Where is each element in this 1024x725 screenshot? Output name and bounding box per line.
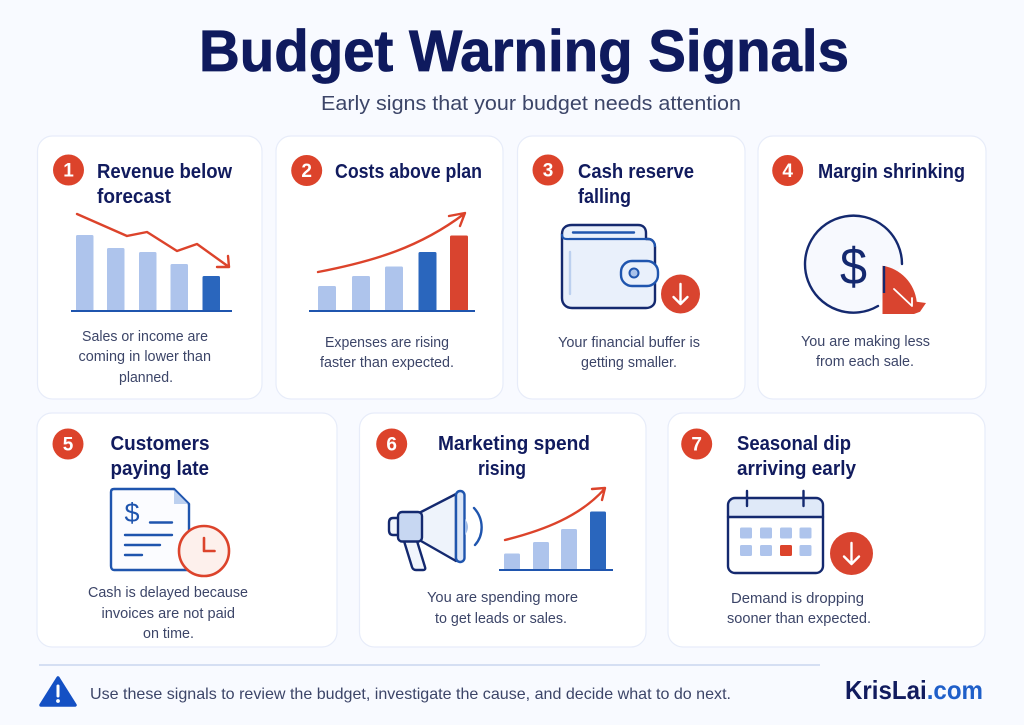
panel: costs above plan — [276, 136, 503, 399]
bar chart: rising costs — [309, 213, 475, 311]
panel: revenue below forecast — [38, 136, 262, 399]
badge 6 — [376, 428, 407, 460]
badge 2 — [291, 155, 322, 186]
heading: Cash reserve — [578, 161, 694, 183]
icon: down arrow badge — [830, 532, 873, 575]
description — [78, 329, 211, 386]
bar chart: rising spend — [499, 488, 613, 570]
footer note: Use these signals to review the budget, investigate the cause, and decide what to do next. — [90, 686, 731, 703]
badge 7: 7 — [691, 434, 702, 456]
badge 4: 4 — [782, 161, 793, 182]
badge 1: 1 — [63, 160, 74, 182]
badge 6: 6 — [386, 434, 397, 456]
icon: coin with shrinking margin: $ — [840, 238, 867, 296]
description: invoices are not paid — [102, 606, 235, 622]
description: from each sale. — [816, 354, 914, 370]
heading — [97, 161, 232, 208]
badge 2: 2 — [301, 161, 312, 182]
description: faster than expected. — [320, 355, 454, 371]
description: getting smaller. — [581, 355, 677, 371]
heading: arriving early — [737, 458, 857, 480]
badge 4 — [772, 155, 803, 186]
description: You are making less — [801, 334, 930, 350]
subtitle: Early signs that your budget needs attention — [321, 92, 741, 115]
badge 5: 5 — [63, 434, 74, 456]
icon: wallet — [562, 225, 658, 308]
icon: calendar — [728, 491, 823, 573]
title: Budget Warning Signals — [199, 19, 849, 84]
icon: coin with shrinking margin — [805, 216, 926, 314]
description: Expenses are rising — [325, 335, 449, 351]
icon: invoice: $ — [124, 498, 140, 528]
heading: Revenue below — [97, 161, 232, 183]
heading: paying late — [110, 458, 209, 480]
description: Sales or income are — [82, 329, 208, 345]
heading — [110, 433, 210, 480]
heading — [737, 433, 857, 480]
heading — [438, 433, 590, 480]
description: to get leads or sales. — [435, 611, 567, 627]
bar chart: falling revenue — [71, 214, 232, 311]
panel: cash reserve falling — [518, 136, 745, 399]
heading: falling — [578, 186, 631, 208]
description: You are spending more — [427, 590, 578, 606]
panel: customers paying late — [37, 413, 337, 647]
icon: warning triangle — [41, 678, 75, 705]
panel: margin shrinking — [758, 136, 986, 399]
description — [427, 590, 578, 627]
heading: rising — [478, 458, 526, 480]
description: planned. — [119, 370, 173, 386]
badge 3: 3 — [543, 160, 553, 182]
icon: invoice — [111, 489, 189, 570]
badge 3 — [532, 154, 564, 186]
heading: Costs above plan — [335, 161, 482, 183]
description — [88, 585, 248, 642]
icon: clock — [179, 526, 229, 576]
panel: marketing spend rising — [360, 413, 646, 647]
badge 5 — [52, 428, 84, 460]
heading: Customers — [110, 433, 210, 455]
heading: Margin shrinking — [818, 161, 965, 183]
description — [727, 591, 871, 627]
description — [801, 334, 930, 370]
heading: Seasonal dip — [737, 433, 851, 455]
brand logo text: KrisLai.com — [845, 675, 983, 705]
badge 1 — [53, 154, 84, 186]
icon: megaphone — [389, 491, 482, 570]
description: Your financial buffer is — [558, 335, 700, 351]
icon: down arrow badge — [661, 274, 700, 314]
description: Cash is delayed because — [88, 585, 248, 601]
description: sooner than expected. — [727, 611, 871, 627]
description — [320, 335, 454, 371]
heading: Marketing spend — [438, 433, 590, 455]
heading: forecast — [97, 186, 171, 208]
description — [558, 335, 700, 371]
heading — [578, 161, 694, 208]
badge 7 — [681, 428, 712, 460]
panel: seasonal dip arriving early — [668, 413, 985, 647]
description: Demand is dropping — [731, 591, 864, 607]
description: on time. — [143, 626, 194, 642]
description: coming in lower than — [78, 349, 211, 365]
